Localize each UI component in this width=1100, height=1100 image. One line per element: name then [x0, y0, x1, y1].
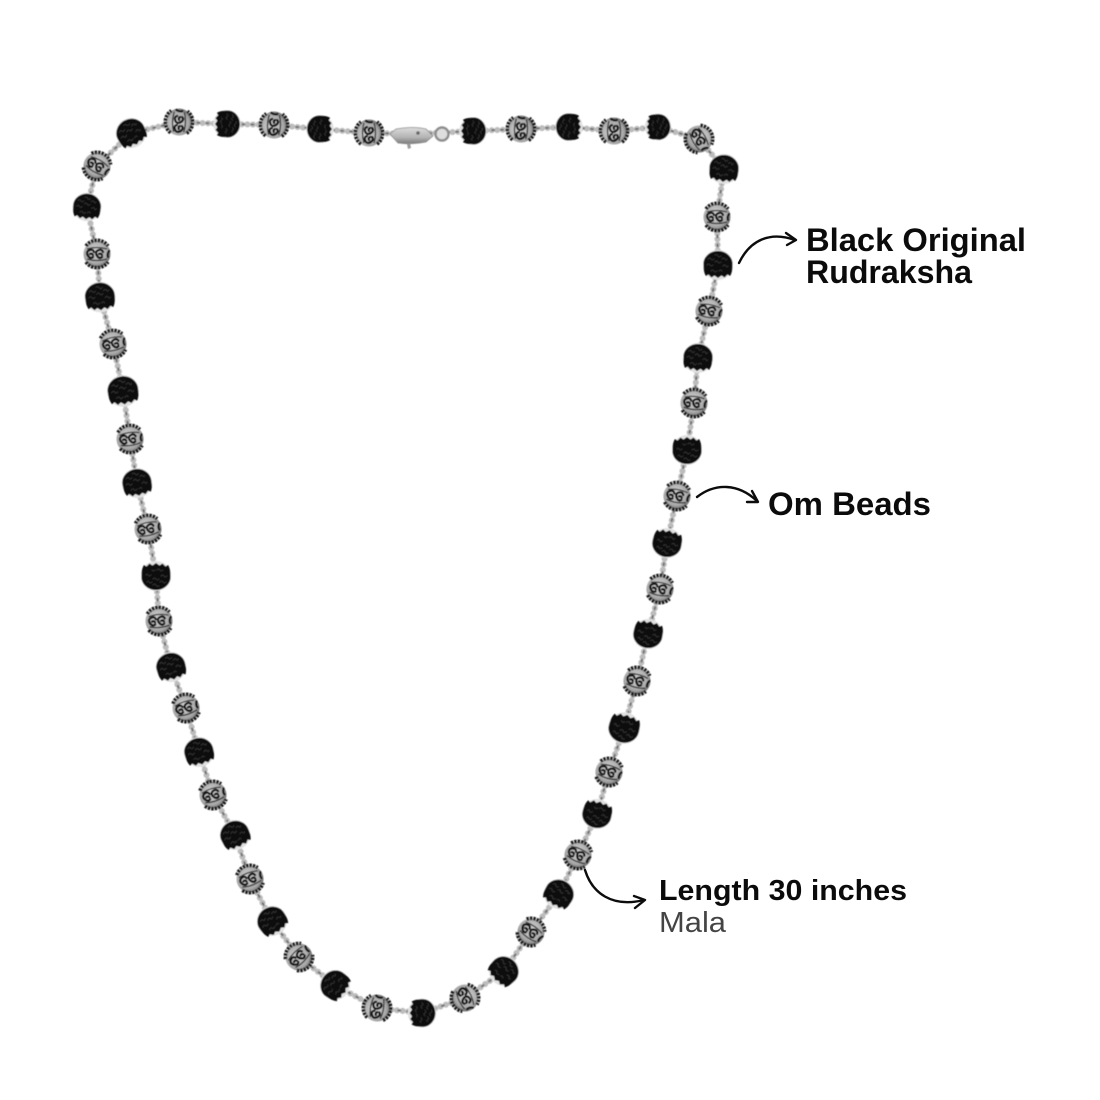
om bead — [233, 862, 267, 896]
om bead — [260, 111, 288, 139]
rudraksha bead — [72, 192, 102, 222]
om bead — [644, 573, 676, 605]
om bead — [512, 913, 550, 951]
arrow: length callout — [585, 870, 645, 908]
rudraksha bead — [630, 616, 666, 652]
rudraksha bead — [251, 900, 293, 942]
label: black original rudraksha — [806, 222, 1026, 290]
om bead — [592, 755, 626, 789]
rudraksha bead — [682, 342, 714, 374]
om bead — [132, 513, 164, 545]
label: mala: Mala — [659, 907, 727, 939]
om bead — [621, 664, 653, 698]
om bead — [169, 691, 203, 725]
om bead — [600, 118, 628, 144]
rudraksha bead — [459, 117, 487, 145]
rudraksha bead — [579, 796, 615, 832]
rudraksha bead — [672, 435, 702, 465]
om bead — [97, 328, 129, 360]
rudraksha bead — [306, 115, 334, 143]
arrow: om beads callout — [697, 487, 758, 502]
rudraksha bead — [703, 250, 733, 280]
arrow: rudraksha callout — [739, 233, 796, 263]
om bead — [680, 120, 718, 158]
om bead — [507, 115, 535, 143]
rudraksha bead — [181, 734, 217, 770]
om bead — [78, 147, 116, 185]
label: black original rudraksha: Black Original — [806, 222, 1026, 258]
om bead — [165, 108, 193, 136]
rudraksha bead — [120, 466, 154, 500]
rudraksha bead — [408, 999, 436, 1027]
om bead — [144, 606, 174, 636]
om bead — [355, 120, 383, 146]
om bead — [84, 240, 110, 268]
rudraksha bead — [215, 815, 255, 855]
om bead — [115, 424, 145, 454]
rudraksha bead — [483, 950, 525, 992]
om bead — [704, 203, 730, 231]
om bead — [560, 837, 596, 873]
om bead — [280, 938, 318, 976]
rudraksha bead — [555, 113, 583, 141]
rudraksha bead — [645, 114, 671, 140]
rudraksha bead — [539, 874, 579, 914]
lobster clasp — [390, 128, 448, 149]
label: black original rudraksha: Rudraksha — [806, 254, 972, 290]
om bead — [661, 480, 693, 512]
rudraksha bead — [314, 964, 356, 1006]
om bead — [679, 388, 709, 418]
necklace: rudraksha and om bead mala — [72, 108, 740, 1027]
rudraksha bead — [708, 153, 740, 185]
label: om beads: Om Beads — [768, 486, 931, 522]
rudraksha bead — [153, 649, 189, 685]
rudraksha bead — [213, 110, 241, 138]
rudraksha bead — [111, 113, 151, 153]
rudraksha bead — [83, 280, 117, 314]
rudraksha bead — [605, 709, 643, 747]
om bead — [693, 295, 725, 327]
label: length 30 inches: Length 30 inches — [659, 875, 907, 907]
silver chain links — [87, 122, 724, 1013]
rudraksha bead — [649, 525, 685, 561]
om bead — [196, 778, 230, 812]
rudraksha bead — [141, 561, 171, 591]
rudraksha bead — [105, 373, 141, 409]
om bead — [447, 980, 483, 1016]
om bead — [361, 992, 393, 1024]
